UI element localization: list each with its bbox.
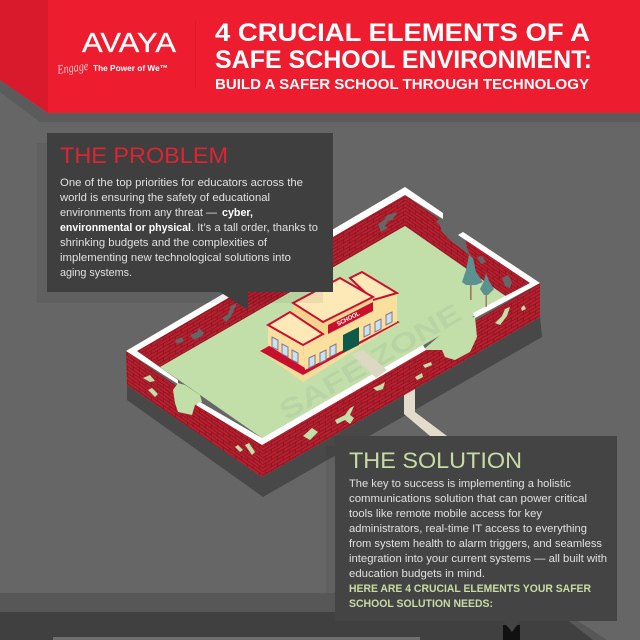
problem body text: shrinking budgets and the complexities of	[60, 237, 268, 249]
back wall left	[137, 195, 405, 367]
panel: the problem	[47, 133, 333, 310]
panel shadow: the problem	[37, 143, 323, 303]
title: SAFE SCHOOL ENVIRONMENT:	[215, 46, 592, 74]
solution call to action	[349, 583, 591, 610]
windows	[272, 312, 392, 368]
header banner	[0, 0, 640, 113]
solution body text: education budgets in mind.	[349, 568, 485, 580]
problem body text: . It’s a tall order, thanks to	[191, 222, 318, 234]
panel: the solution	[335, 436, 617, 632]
solution body text: communications solution that can power critical	[349, 493, 587, 505]
school building	[260, 272, 400, 382]
heading: the problem: THE PROBLEM	[60, 143, 228, 168]
holes in back walls	[175, 212, 512, 344]
down arrow	[503, 625, 520, 640]
walled school yard	[126, 187, 542, 497]
problem body text: environments from any threat —	[60, 207, 218, 219]
solution body text: from system health to alarm triggers, and seamless	[349, 538, 602, 550]
school sign: SCHOOL	[336, 311, 361, 328]
solution body text: The key to success is implementing a holistic	[349, 478, 571, 490]
green lawn	[160, 226, 507, 438]
solution call to action: HERE ARE 4 CRUCIAL ELEMENTS YOUR SAFER	[349, 583, 591, 595]
logo: Avaya: The Power of We™	[93, 63, 168, 73]
problem body text: One of the top priorities for educators across the	[60, 177, 303, 189]
tree small	[480, 273, 494, 307]
solution body text: administrators, real-time IT access to everything	[349, 523, 587, 535]
front wall	[303, 293, 397, 370]
logo: Avaya	[56, 27, 176, 77]
logo: Avaya: AVAYA	[82, 27, 176, 58]
solution body text: integration into your current systems — all built with	[349, 553, 607, 565]
solution body text: tools like remote mobile access for key	[349, 508, 542, 520]
back wall right	[405, 195, 530, 297]
breaks in front walls	[143, 305, 526, 455]
door	[343, 327, 359, 353]
solution call to action: SCHOOL SOLUTION NEEDS:	[349, 598, 493, 610]
road outside the wall	[404, 387, 447, 436]
title	[215, 19, 592, 93]
problem body text: world is ensuring the safety of educational	[59, 192, 270, 204]
wall foundation	[127, 317, 542, 497]
roof back wing	[350, 272, 397, 300]
problem body text	[59, 177, 318, 279]
front wall left	[126, 351, 262, 477]
front wall right	[262, 283, 540, 477]
title: 4 CRUCIAL ELEMENTS OF A	[215, 19, 590, 47]
heading: the solution: THE SOLUTION	[349, 448, 522, 473]
title: BUILD A SAFER SCHOOL THROUGH TECHNOLOGY	[215, 77, 589, 93]
problem body text: cyber,	[222, 207, 253, 219]
side wall	[268, 325, 305, 368]
safe zone watermark: SAFE ZONE	[274, 298, 467, 426]
tree large	[462, 255, 483, 300]
solution body text	[349, 478, 607, 580]
central block wall	[293, 297, 373, 336]
logo: Avaya: Engage	[56, 58, 89, 77]
problem body text: implementing new technological solutions into	[60, 252, 291, 264]
base slab	[260, 300, 400, 382]
path to school	[352, 350, 387, 378]
panel shadow: the solution	[326, 446, 608, 593]
white wall caps	[126, 187, 540, 445]
problem body text: environmental or physical	[60, 222, 191, 234]
left roof	[268, 312, 323, 345]
main roof	[293, 278, 373, 322]
problem body text: aging systems.	[60, 267, 132, 279]
